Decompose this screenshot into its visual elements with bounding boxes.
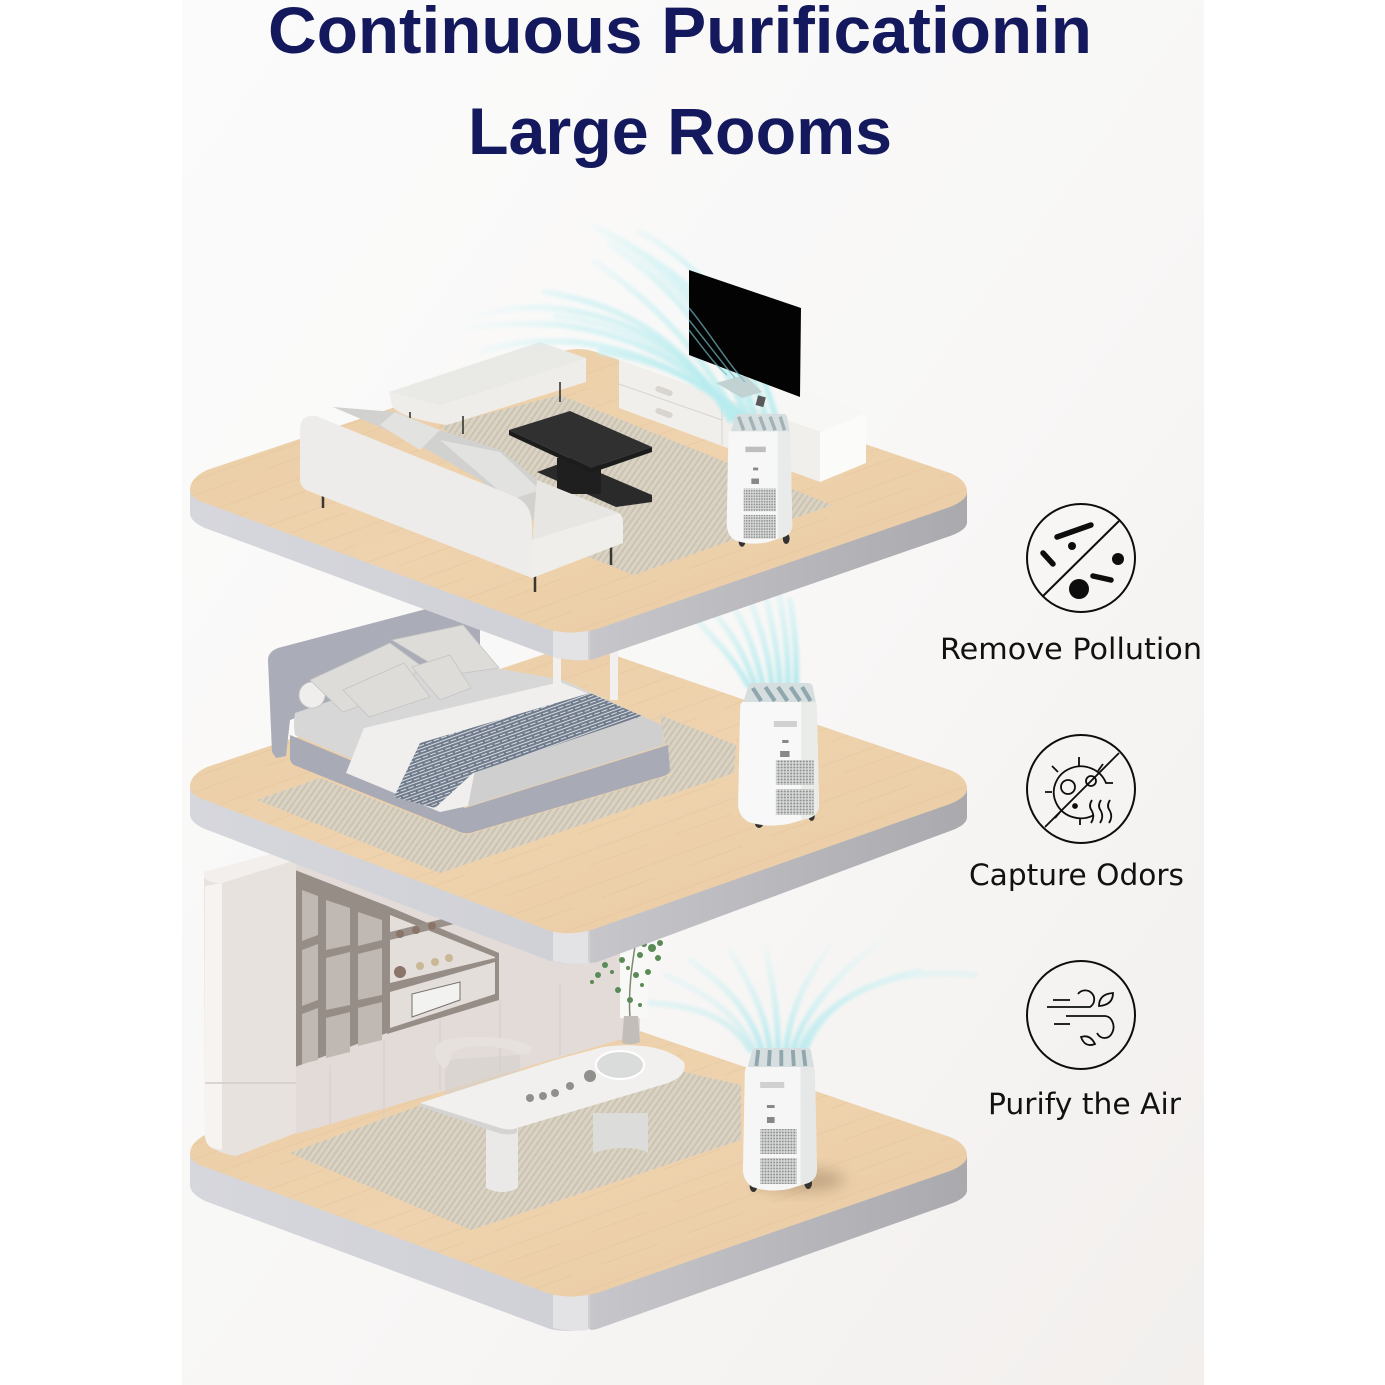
floor slab: dining room bbox=[190, 1013, 967, 1331]
bedroom rug bbox=[257, 715, 736, 873]
purifier: dining room bbox=[743, 1048, 817, 1192]
plant and vase bbox=[590, 938, 663, 1044]
title: Large Rooms bbox=[468, 94, 892, 168]
label: purify the air: Purify the Air bbox=[988, 1087, 1181, 1121]
feature: capture odors bbox=[969, 735, 1184, 892]
label: remove pollution: Remove Pollution bbox=[940, 632, 1202, 666]
bed bbox=[268, 608, 670, 833]
icon: pollution particles bbox=[1027, 504, 1135, 612]
floor slab: living room bbox=[190, 349, 967, 660]
purifier: living room bbox=[727, 414, 792, 547]
TV cabinet bbox=[619, 345, 866, 482]
dining table bbox=[420, 1045, 685, 1192]
dining rug bbox=[290, 1055, 741, 1230]
airflow: living room bbox=[450, 220, 775, 420]
living rug bbox=[440, 395, 832, 575]
purifier: bedroom bbox=[738, 683, 819, 828]
support posts bbox=[553, 650, 618, 700]
title bbox=[268, 0, 1092, 168]
feature: purify the air bbox=[988, 961, 1181, 1121]
purifier shadow: dining room bbox=[755, 1168, 845, 1192]
chair bbox=[435, 1037, 532, 1100]
airflow: bedroom bbox=[695, 590, 796, 685]
wall cabinet bbox=[204, 853, 296, 1156]
bench bbox=[389, 342, 586, 434]
feature: remove pollution bbox=[940, 504, 1202, 666]
TV bbox=[689, 270, 801, 407]
pillows bbox=[299, 625, 499, 717]
panel: middle floor bedroom bbox=[190, 590, 967, 964]
panel: top floor living room bbox=[190, 220, 967, 660]
icon: wind and leaves bbox=[1027, 961, 1135, 1069]
floor slab: bedroom bbox=[190, 646, 967, 964]
panel: bottom floor dining room bbox=[190, 850, 975, 1331]
sofa bbox=[300, 407, 623, 592]
icon: odor microbe bbox=[1027, 735, 1135, 843]
wall with shelves bbox=[295, 850, 640, 1140]
coffee table bbox=[509, 411, 652, 507]
airflow: dining room bbox=[650, 920, 975, 1050]
label: capture odors: Capture Odors bbox=[969, 858, 1184, 892]
